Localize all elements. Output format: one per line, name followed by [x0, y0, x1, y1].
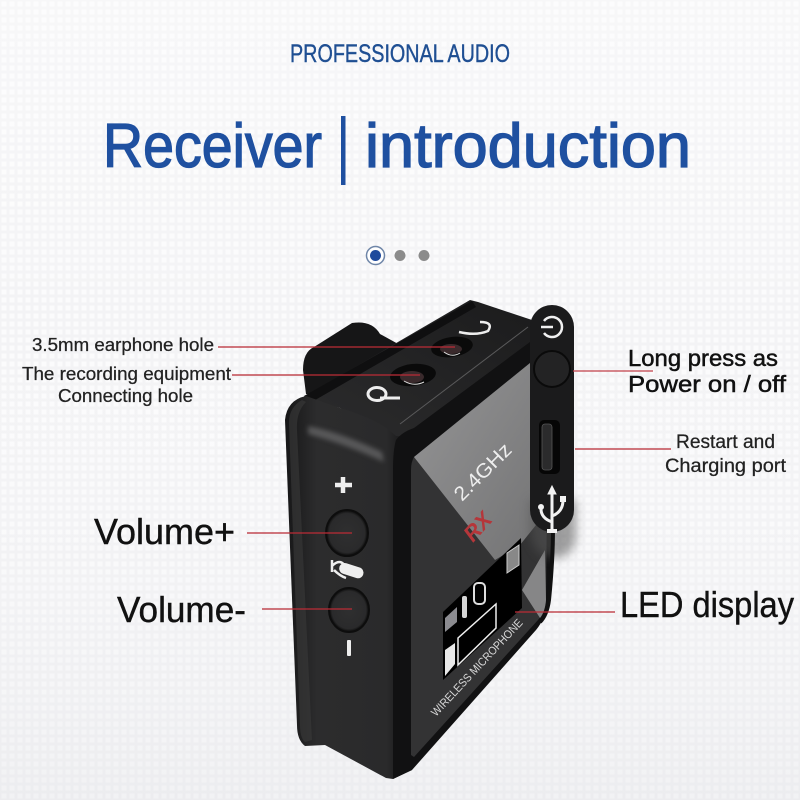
callout: Volume+: Volume+: [94, 511, 235, 552]
text WIRELESS MICROPHONE: WIRELESS MICROPHONE: [429, 617, 526, 719]
LED display: [443, 538, 522, 680]
callout: Long press as Power on / off: Long press as: [628, 345, 778, 371]
text RX: RX: [458, 506, 498, 546]
title: Receiver | introduction: [103, 112, 691, 185]
callout: recording equipment connecting hole: The recording equipment: [22, 364, 231, 384]
icon: minus: [347, 640, 351, 656]
glass reflection: [414, 363, 540, 560]
front face: [393, 340, 554, 779]
recording jack: [389, 362, 437, 388]
callout: Restart and Charging port: Restart and: [676, 432, 775, 453]
USB-C port: [539, 420, 560, 474]
title: Receiver | introduction: Receiver: [103, 112, 322, 181]
callout: recording equipment connecting hole: Connecting hole: [58, 386, 193, 406]
icon: plus: [335, 477, 352, 493]
cable: [540, 528, 553, 622]
earphone jack: [430, 334, 474, 360]
icon: USB: [538, 486, 566, 533]
icon: microphone: [332, 560, 365, 580]
button: volume up: [326, 510, 368, 556]
title: Receiver | introduction: introduction: [365, 112, 691, 181]
callout: Long press as Power on / off: Power on / off: [628, 371, 787, 397]
side face: [285, 396, 412, 779]
device: wireless receiver: [285, 300, 554, 779]
belt clip behind device: [303, 322, 400, 400]
callout: Long press as Power on / off: [573, 345, 787, 397]
pagination dots: [366, 246, 430, 264]
strap panel with controls: [530, 305, 576, 622]
icon: headphones: [459, 322, 490, 334]
icon: power: [541, 317, 562, 337]
text 2.4GHz: 2.4GHz: [450, 439, 516, 506]
icon: mic jack: [368, 388, 400, 400]
callout: recording equipment connecting hole: [22, 364, 420, 406]
power button: [534, 351, 570, 387]
top face: [302, 300, 545, 440]
eyebrow: PROFESSIONAL AUDIO: PROFESSIONAL AUDIO: [290, 40, 510, 68]
callout: Restart and Charging port: [575, 432, 787, 477]
pill: [530, 305, 574, 532]
button: volume down: [329, 588, 369, 632]
callout: 3.5mm earphone hole: 3.5mm earphone hole: [32, 335, 214, 355]
callout: Volume-: Volume-: [117, 589, 246, 630]
shadow: [530, 500, 576, 558]
callout: Restart and Charging port: Charging port: [665, 456, 787, 477]
